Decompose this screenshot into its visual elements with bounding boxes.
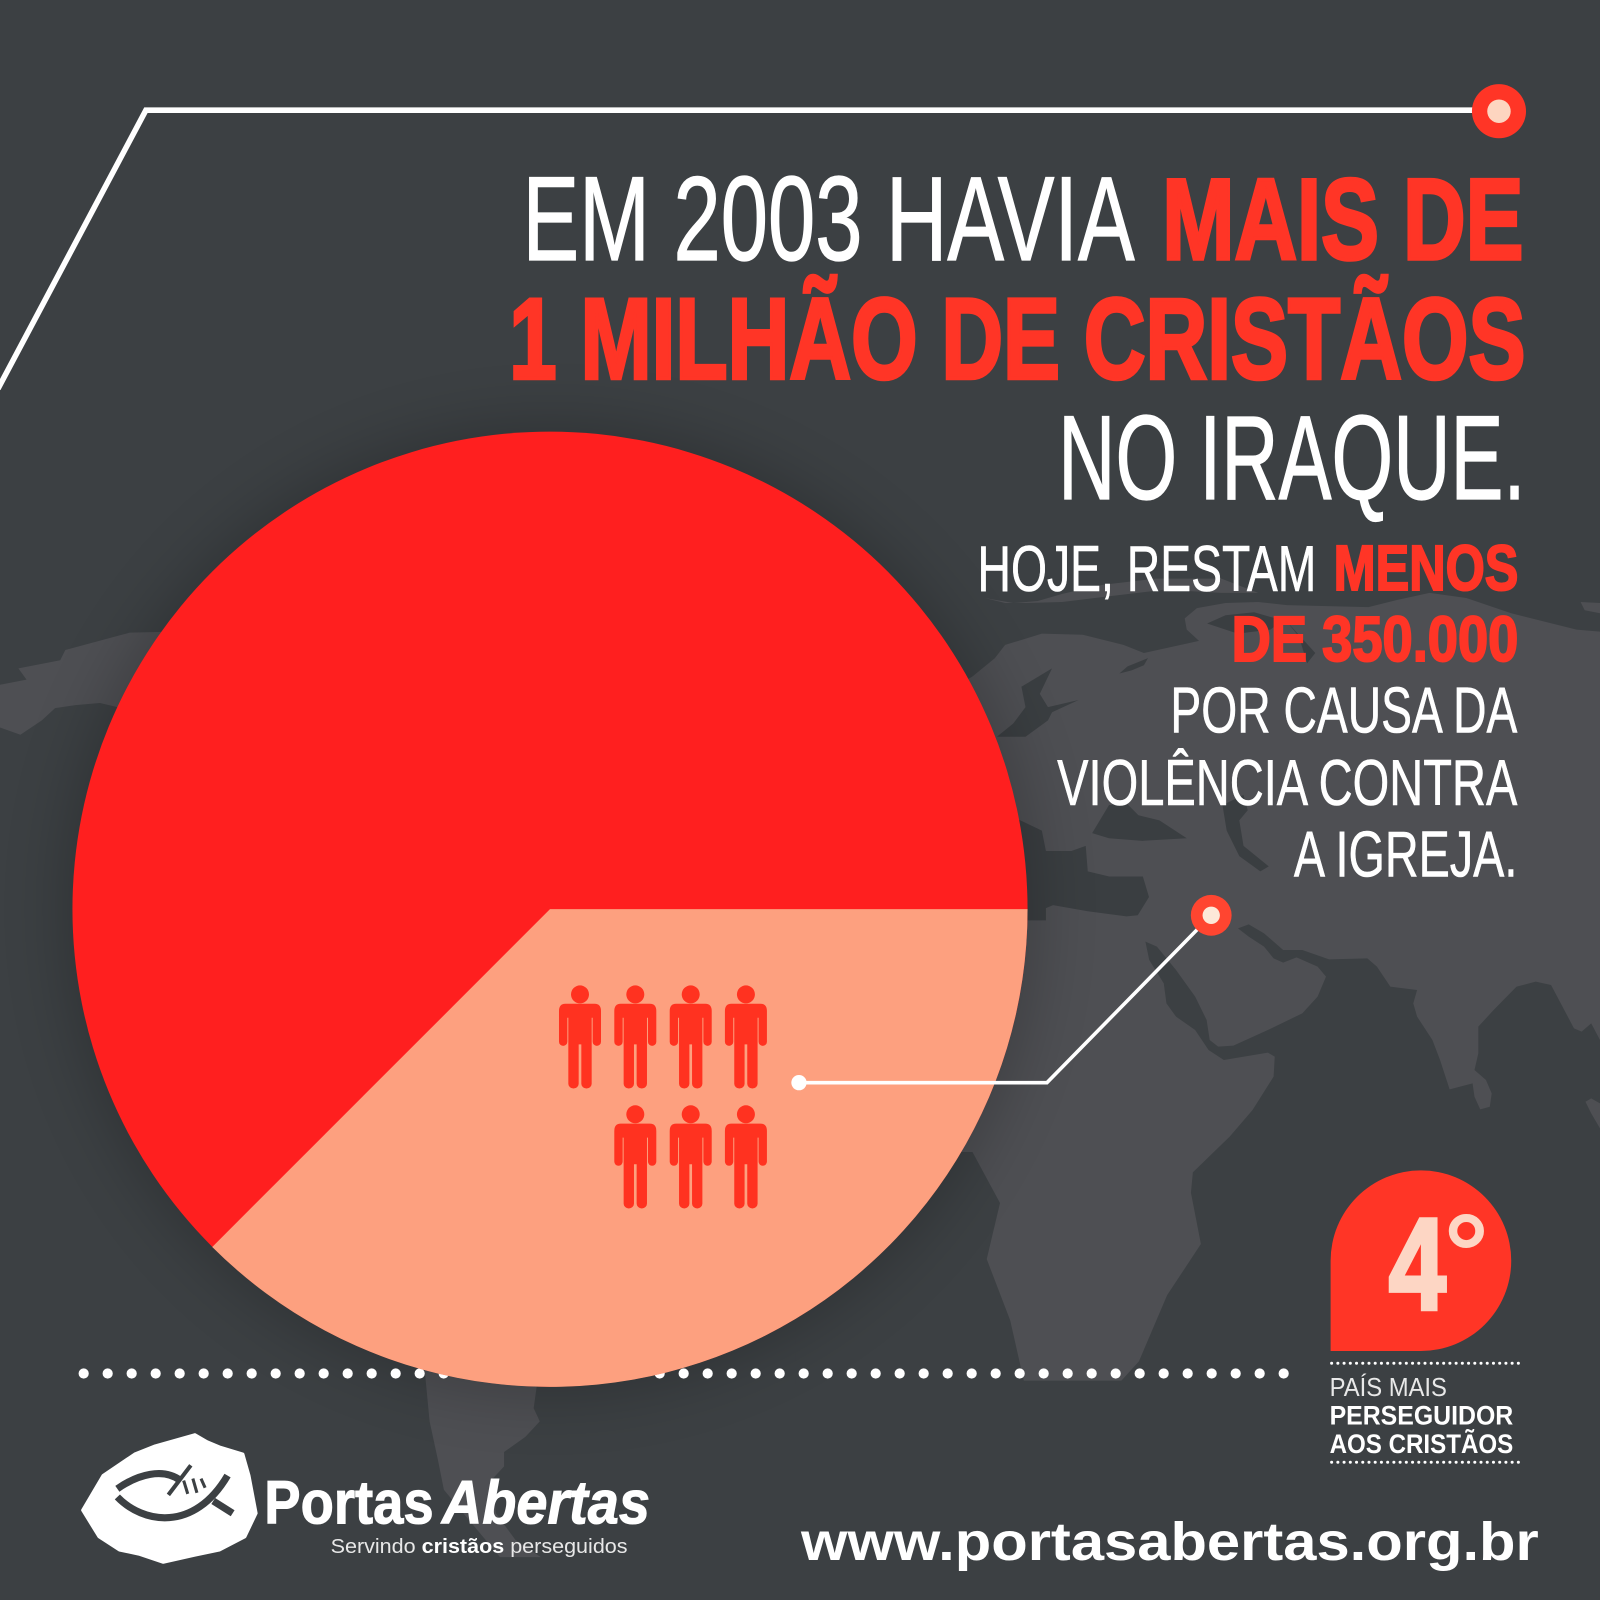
map: south america [423, 1357, 541, 1557]
badge caption: PERSEGUIDOR [1330, 1400, 1513, 1430]
logo wordmark: Portas [264, 1468, 434, 1536]
badge degree sign: ° [1444, 1192, 1489, 1315]
headline: EM 2003 HAVIA [522, 153, 1135, 286]
logo tagline: Servindo cristãos perseguidos [331, 1536, 628, 1558]
badge number: 4 [1389, 1191, 1446, 1337]
marker: Iraq [1191, 895, 1232, 936]
map: atlantic west of africa [796, 1152, 1024, 1384]
headline [509, 153, 1526, 525]
world map [0, 579, 1600, 1557]
map: north america [0, 632, 306, 918]
map: black sea [1092, 803, 1187, 841]
badge caption: AOS CRISTÃOS [1330, 1429, 1513, 1459]
logo: Portas Abertas: Abertas [440, 1468, 650, 1536]
map: caspian sea [1222, 795, 1269, 871]
dotted divider [84, 1368, 1284, 1378]
badge: 4th place [1331, 1170, 1511, 1351]
logo blob [83, 1435, 256, 1562]
map: indonesia island [1585, 1098, 1600, 1133]
top marker [1472, 84, 1526, 138]
logo fish mark [117, 1465, 233, 1518]
logo: Portas Abertas [83, 1435, 650, 1562]
subheading: A IGREJA. [1294, 818, 1517, 891]
subheading: HOJE, RESTAM [978, 532, 1316, 605]
map: eurasia and africa land [816, 593, 1600, 1381]
map: kara pocket [1207, 612, 1283, 634]
connector to Iraq marker [791, 895, 1232, 1090]
badge drop [1331, 1170, 1511, 1351]
subheading: DE 350.000 [1232, 603, 1518, 675]
pie chart [72, 432, 1028, 1387]
map: white sea spur [1119, 658, 1148, 673]
pie: remaining share [212, 909, 1028, 1387]
connector start dot [791, 1075, 807, 1090]
badge caption: PAÍS MAIS [1330, 1373, 1447, 1402]
map: baltic sea [997, 668, 1079, 737]
badge caption [1330, 1363, 1519, 1462]
map: mediterranean sea [983, 810, 1149, 920]
top frame line [0, 110, 1500, 389]
map: greenland strip [985, 579, 1258, 603]
map: strait sliver [1287, 621, 1315, 663]
map: arctic island [1581, 602, 1600, 613]
map: indian ocean and gulfs [1115, 924, 1600, 1400]
subheading [978, 532, 1518, 891]
pie shadow [62, 421, 1038, 1397]
subheading: MENOS [1334, 532, 1518, 604]
icon: people group [559, 985, 767, 1208]
pie: lost share [72, 432, 1028, 1387]
connector line [799, 915, 1211, 1083]
website url: www.portasabertas.org.br [800, 1512, 1539, 1572]
